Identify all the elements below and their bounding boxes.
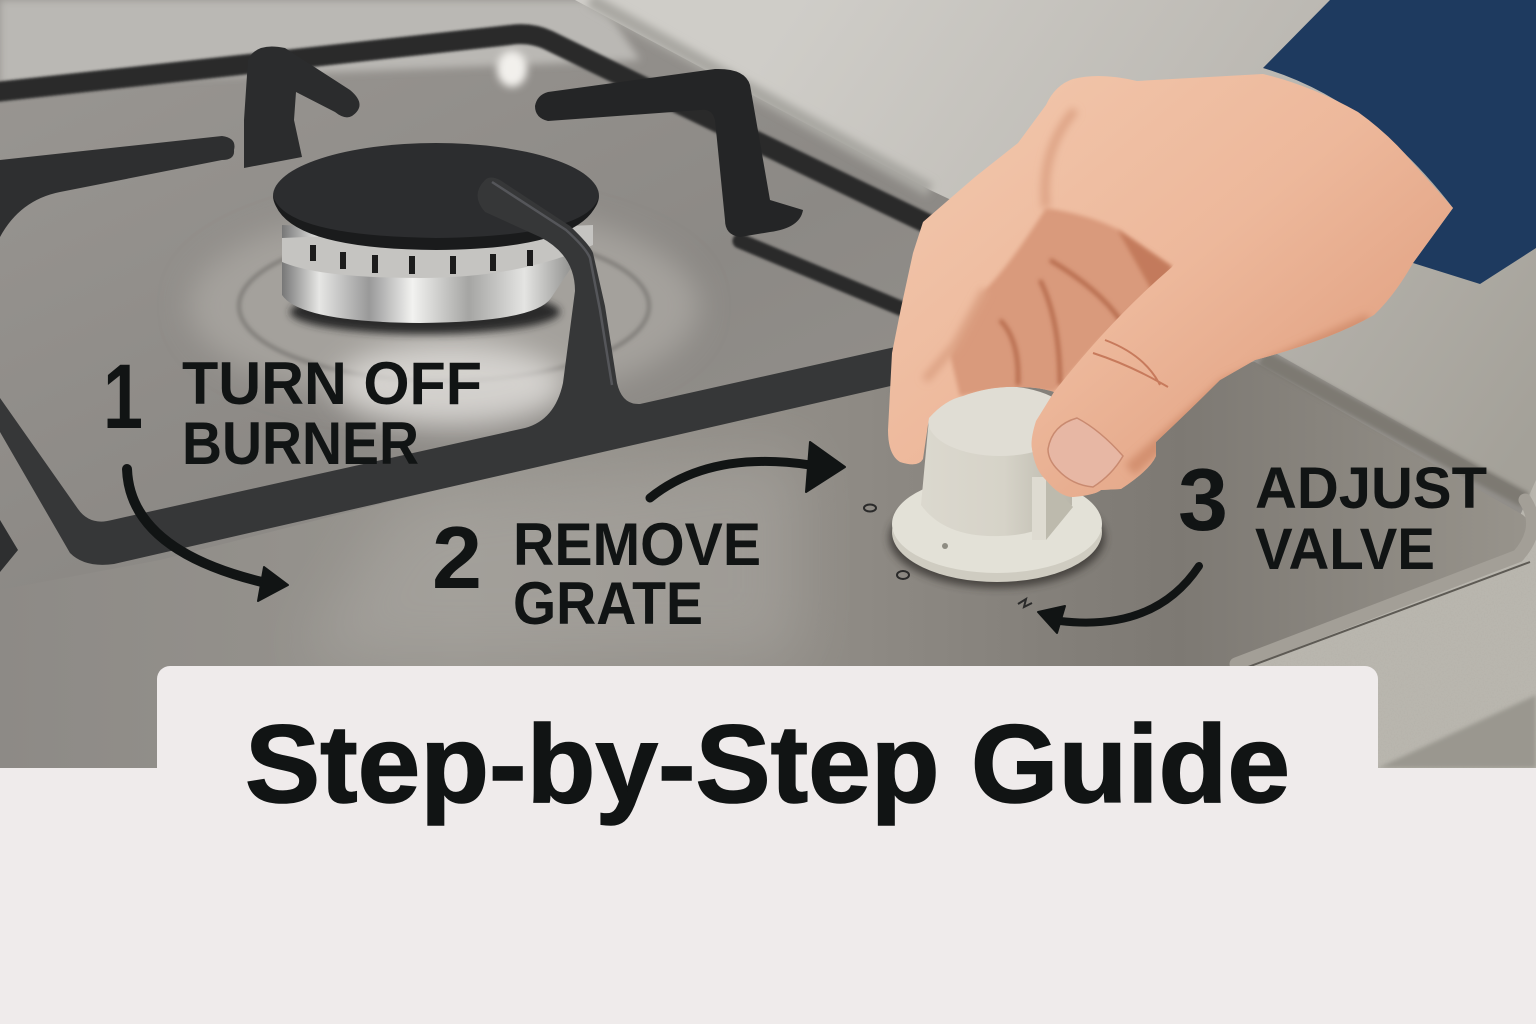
hand (888, 74, 1453, 497)
back of stove, light blurred area (0, 0, 640, 85)
title tab (157, 666, 1378, 786)
front grate with prong (0, 178, 895, 565)
burner shadow (290, 290, 560, 334)
step 1 label (103, 346, 482, 477)
upper left grate bar (0, 136, 234, 237)
thumbnail (1048, 418, 1123, 487)
dial markings (864, 504, 1032, 607)
step 1 label: 1 (103, 346, 143, 448)
plate rim upper (1262, 358, 1525, 500)
arrow 3 (1038, 566, 1199, 633)
steel plate front (0, 362, 1532, 768)
knob (889, 386, 1105, 588)
burner plate ring (239, 231, 649, 381)
step 2 label (432, 508, 761, 637)
arrow 2 (650, 442, 845, 498)
plate rim lower shadow (1240, 562, 1530, 670)
hand sleeve (1263, 0, 1536, 284)
thumb (1032, 266, 1313, 494)
step 3 label: ADJUST (1255, 456, 1487, 521)
burner base plate (189, 206, 699, 406)
counter front edge shadow (1378, 695, 1536, 768)
lower left grate fragment (0, 520, 18, 572)
fingers in shadow (950, 208, 1172, 396)
step 2 label: REMOVE (513, 511, 761, 578)
rear right grate prong (535, 69, 803, 237)
step 3 label (1178, 450, 1487, 582)
prong edge highlight (492, 182, 612, 385)
arrow 1 (127, 469, 288, 601)
thumb creases (1093, 340, 1168, 387)
finger separations (1000, 260, 1120, 385)
steel sheen (300, 450, 800, 660)
plate rim lower (1236, 500, 1533, 664)
knuckle shading (925, 110, 1075, 380)
bottom panel (0, 768, 1536, 1024)
step 3 label: 3 (1178, 450, 1228, 549)
palm gap (1118, 229, 1172, 288)
rear left grate prong (244, 46, 360, 168)
counter top (575, 0, 1536, 500)
step 1 label: BURNER (182, 410, 419, 477)
raised plate edge top (590, 0, 930, 190)
counter front (1160, 480, 1536, 768)
grate glint (497, 51, 527, 87)
burner reflection (335, 343, 565, 427)
burner slotted band (282, 225, 593, 278)
step 1 label: TURN OFF (182, 350, 482, 417)
burner slots (310, 245, 533, 274)
photo: stovetop background (0, 0, 1536, 768)
step 3 label: VALVE (1255, 517, 1435, 582)
burner cap (273, 143, 599, 249)
thumb lower shading (1130, 320, 1370, 470)
rear grate bars (0, 34, 930, 310)
burner ring (282, 225, 593, 323)
step 2 label: GRATE (513, 570, 703, 637)
step 2 label: 2 (432, 508, 482, 607)
title: Step-by-Step Guide (245, 703, 1290, 826)
counter speckle (1240, 570, 1536, 768)
